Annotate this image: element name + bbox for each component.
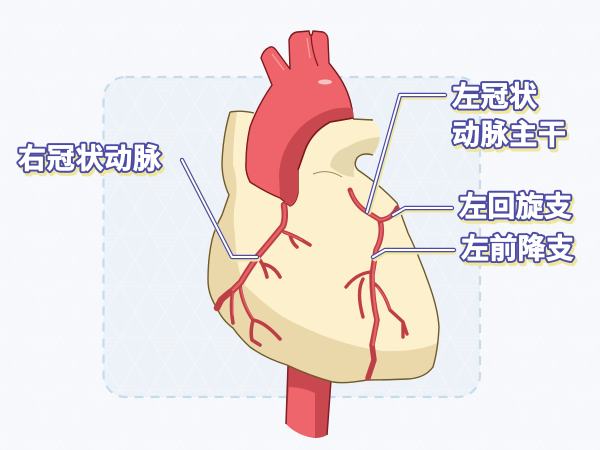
label: right coronary artery: 右冠状动脉 (18, 143, 161, 174)
label: left circumflex: 左回旋支 (461, 194, 574, 225)
aorta highlights (272, 38, 310, 70)
label: left circumflex: 左回旋支 (459, 191, 572, 222)
label: left anterior descending: 左前降支 (461, 233, 574, 264)
heart body (208, 111, 439, 383)
label: left main coronary artery: 左冠状 (452, 81, 537, 112)
label: left main coronary artery (452, 81, 568, 153)
label: left main coronary artery: 左冠状 (454, 84, 539, 115)
label: left circumflex: 左回旋支 (459, 191, 572, 222)
vessel: left main, circumflex and anterior descending arteries (346, 190, 407, 378)
leader: left circumflex (393, 208, 452, 216)
arch inner shadow (279, 108, 353, 206)
vessel: aorta and arch branches (246, 31, 353, 206)
heart outline (208, 111, 439, 383)
label: left anterior descending: 左前降支 (463, 236, 576, 267)
label: left main coronary artery: 动脉主干 (452, 119, 566, 150)
label: left main coronary artery: 左冠状 (452, 81, 537, 112)
pulmonary fold shading (330, 137, 380, 177)
label: right coronary artery: 右冠状动脉 (18, 143, 161, 174)
label: left anterior descending: 左前降支 (461, 233, 574, 264)
leader: left anterior descending (373, 250, 454, 259)
leader: left main coronary artery (367, 95, 445, 212)
label: right coronary artery: 右冠状动脉 (20, 146, 163, 177)
panel: dashed rounded backdrop (104, 77, 480, 397)
vessel: right coronary artery tree (217, 205, 310, 345)
leader: right coronary artery (182, 160, 258, 259)
label: left main coronary artery: 动脉主干 (452, 119, 566, 150)
vessel: inferior vena cava (286, 366, 331, 438)
label: left main coronary artery: 动脉主干 (454, 122, 568, 153)
lower ventricle shading (208, 112, 437, 383)
